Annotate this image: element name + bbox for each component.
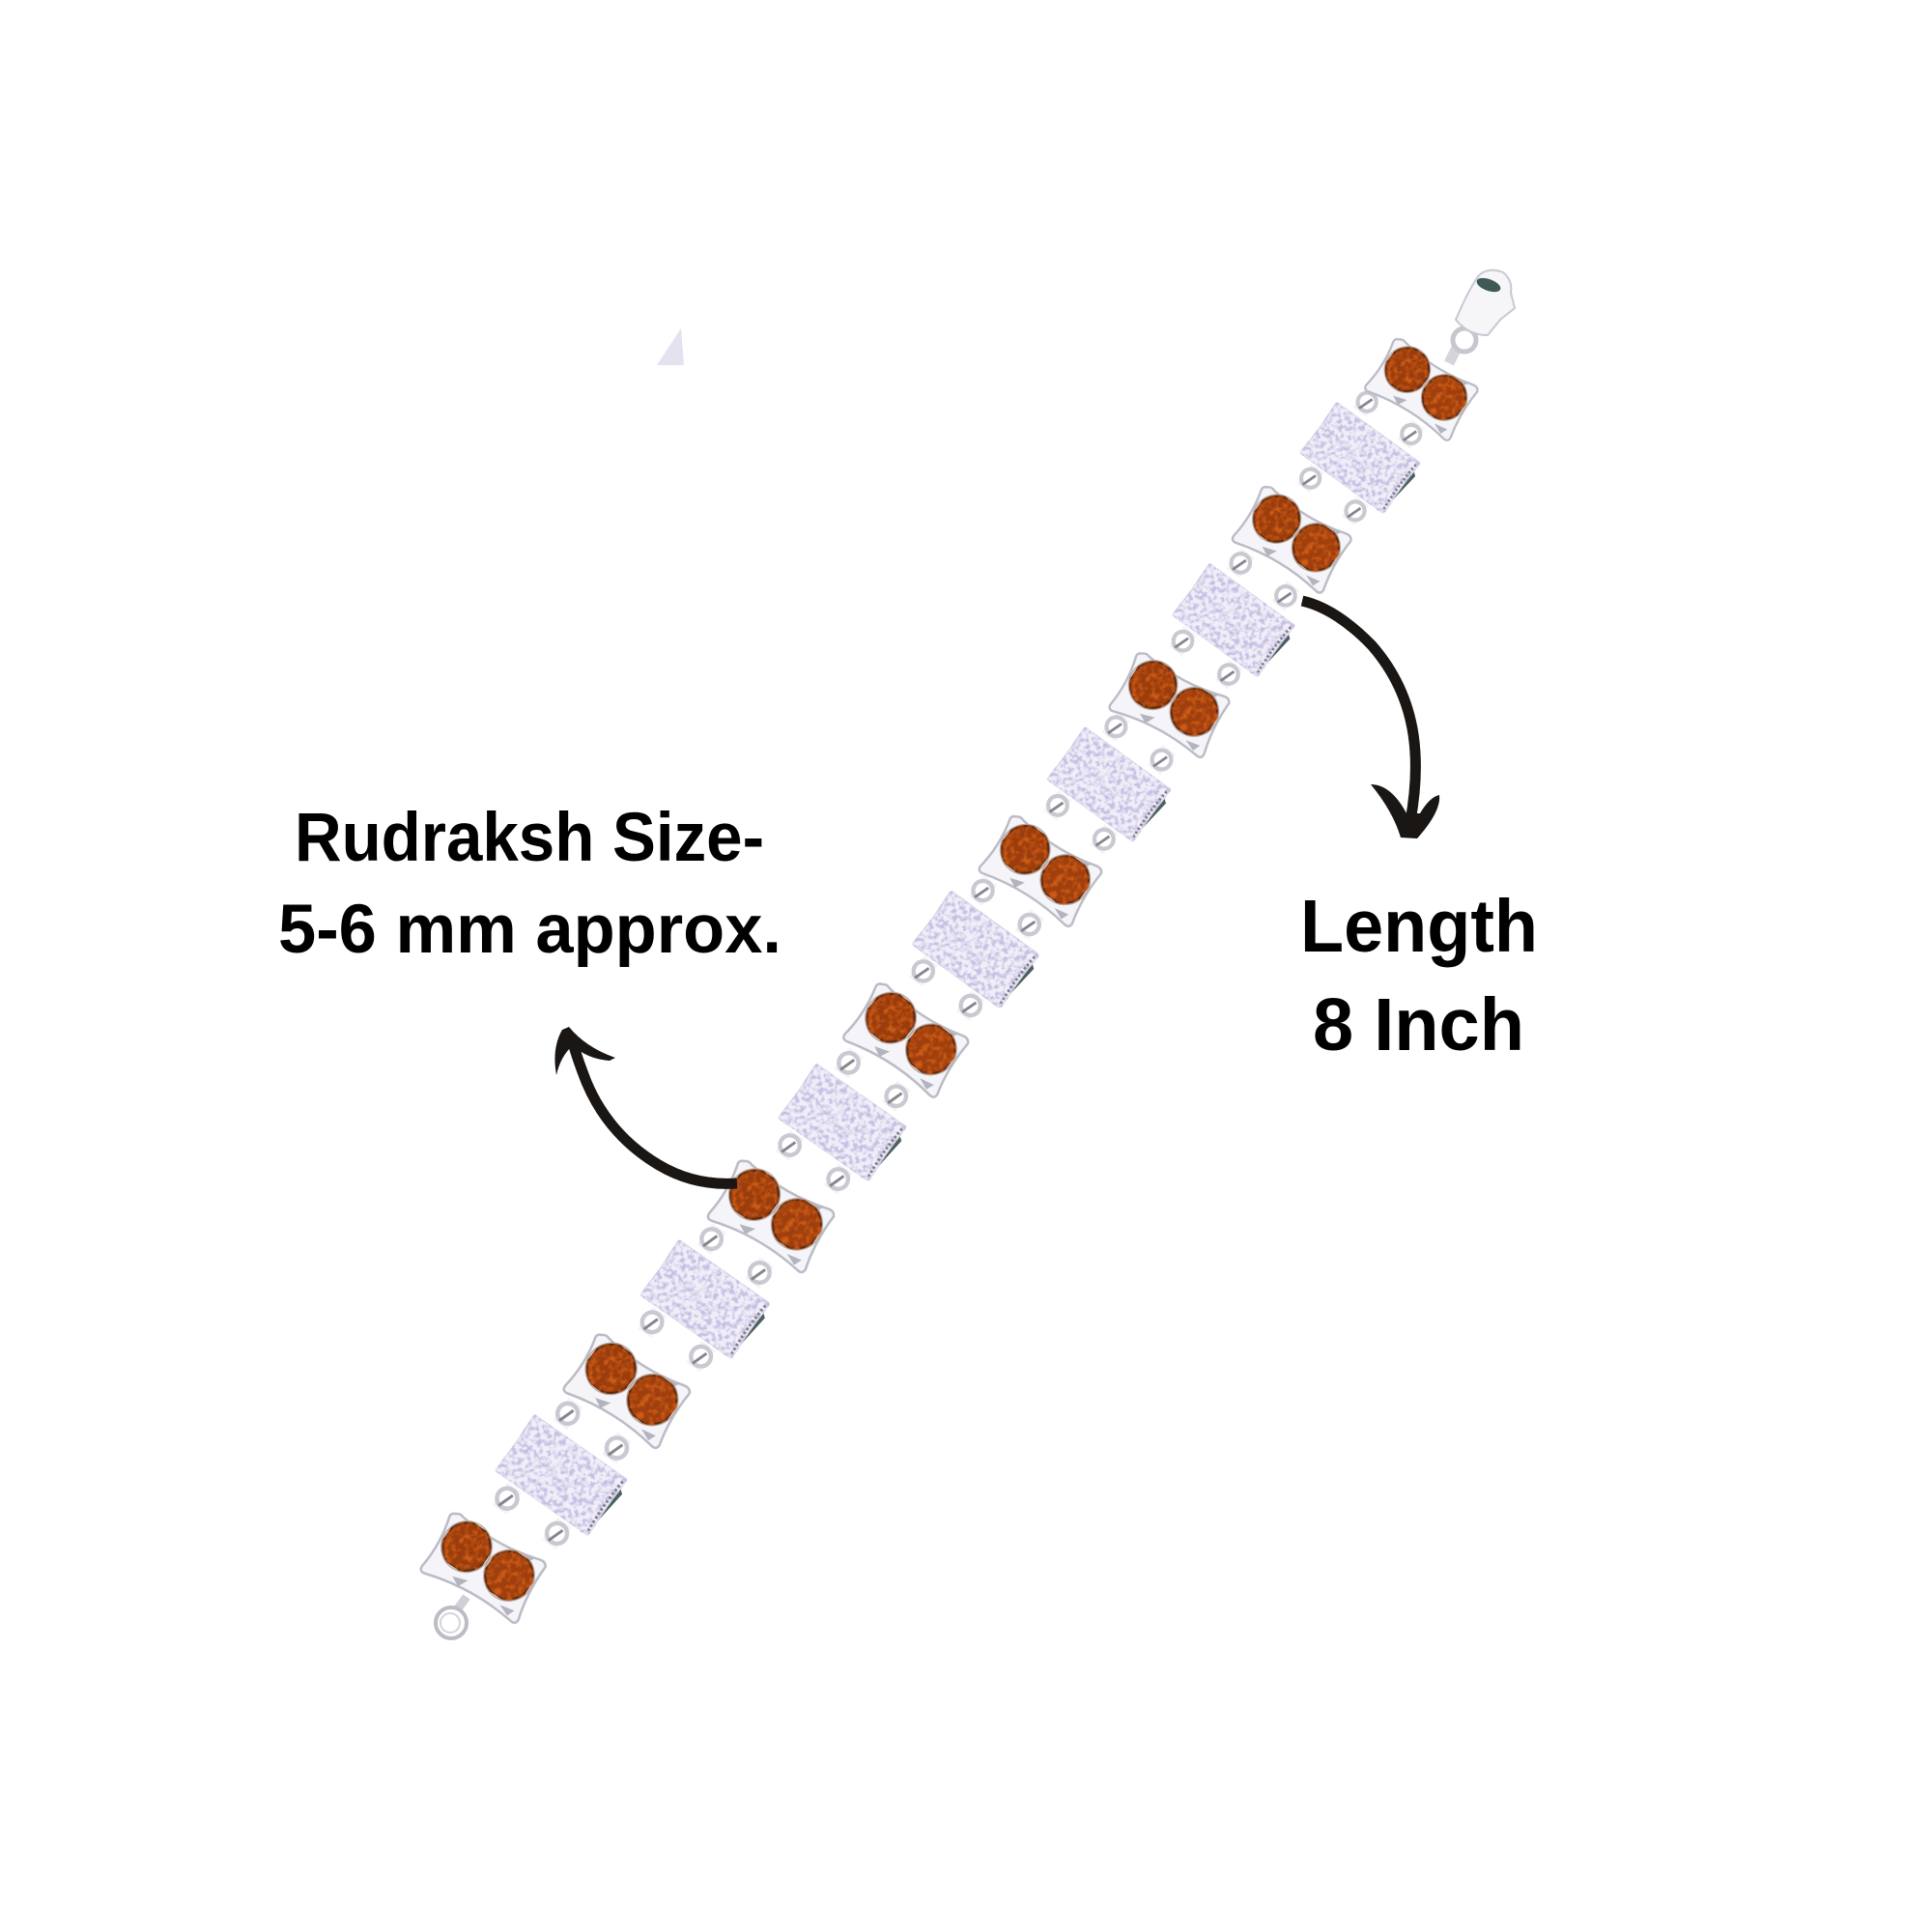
- bead link 2: [1227, 476, 1359, 602]
- bracelet: [414, 270, 1515, 1638]
- bead link 7: [557, 1323, 698, 1457]
- end ring: [436, 1597, 467, 1638]
- lobster clasp: [1449, 270, 1515, 363]
- bead link 3: [1103, 642, 1237, 766]
- plaque 1: [1284, 378, 1441, 537]
- plaque 7: [478, 1387, 650, 1562]
- arrow: rudraksh size: [554, 1027, 737, 1183]
- bead link 6: [701, 1150, 842, 1282]
- arrow: length: [1302, 601, 1439, 838]
- label: length: Length: [1300, 885, 1538, 968]
- plaque 6: [624, 1213, 792, 1384]
- bead link 5: [838, 973, 977, 1106]
- bead link 8: [414, 1502, 554, 1633]
- label: rudraksh size: [278, 800, 781, 968]
- label: rudraksh size: Rudraksh Size-: [295, 800, 764, 876]
- stray speck: [657, 328, 684, 365]
- plaque 5: [761, 1037, 928, 1207]
- plaque 3: [1031, 701, 1193, 867]
- label: length: 8 Inch: [1313, 983, 1524, 1066]
- label: rudraksh size: 5-6 mm approx.: [278, 892, 781, 968]
- bead link 1: [1359, 329, 1486, 448]
- bead link 4: [973, 806, 1110, 935]
- plaque 2: [1156, 538, 1317, 701]
- plaque 4: [895, 865, 1061, 1034]
- label: length: [1300, 885, 1538, 1066]
